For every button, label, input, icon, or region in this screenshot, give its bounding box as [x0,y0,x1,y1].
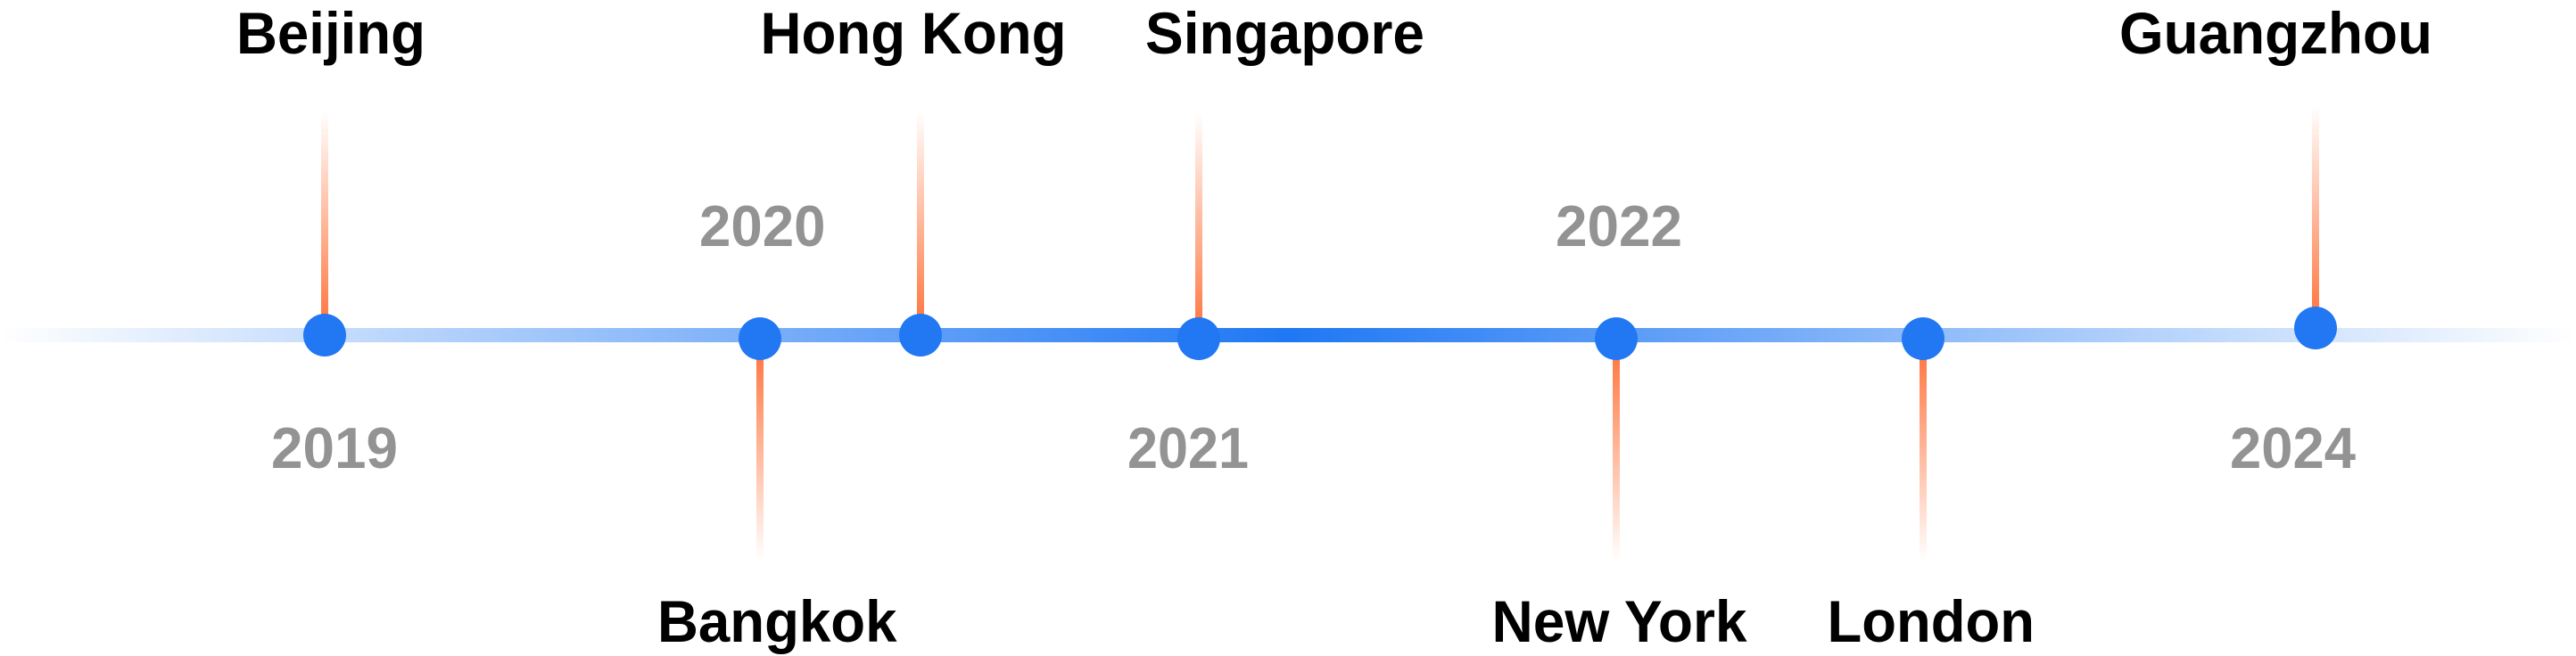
milestone: New York [1491,317,1747,654]
milestone: Singapore [1145,0,1424,360]
marker: London [1902,317,1944,360]
year: 2021: 2021 [1127,415,1249,480]
stem: Bangkok [756,357,764,562]
milestone: Beijing [236,0,425,357]
label: London: London [1827,588,2035,654]
year: 2024: 2024 [2230,415,2356,480]
stem: Hong Kong [917,111,924,318]
stem: Singapore [1195,113,1202,324]
milestone: Guangzhou [2119,0,2432,349]
milestone: Bangkok [657,317,897,654]
label: Guangzhou: Guangzhou [2119,0,2432,66]
marker: New York [1595,317,1638,360]
milestone: London [1827,317,2035,654]
label: Beijing: Beijing [236,0,425,66]
marker: Bangkok [739,317,781,360]
stem: Guangzhou [2312,105,2319,312]
stem: Beijing [321,111,328,318]
year: 2019: 2019 [271,415,398,480]
stem: New York [1613,357,1620,562]
marker: Hong Kong [899,314,942,357]
label: Hong Kong: Hong Kong [760,0,1067,66]
label: Bangkok: Bangkok [657,588,897,654]
milestone: Hong Kong [760,0,1067,357]
timeline axis bar [0,328,2576,342]
year: 2022: 2022 [1556,193,1682,258]
label: Singapore: Singapore [1145,0,1424,66]
marker: Beijing [303,314,346,357]
marker: Singapore [1177,317,1220,360]
year: 2020: 2020 [699,193,826,258]
label: New York: New York [1491,588,1747,654]
marker: Guangzhou [2294,307,2337,349]
stem: London [1920,357,1927,562]
